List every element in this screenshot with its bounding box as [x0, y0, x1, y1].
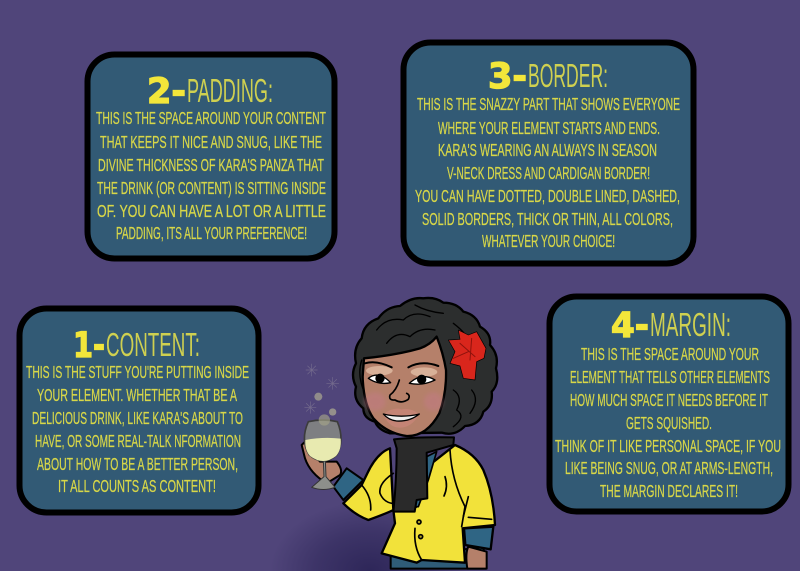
- text: content description: THIS IS THE STUFF YOU'RE PUTTING INSIDE: [26, 362, 249, 382]
- mouth: [383, 409, 419, 428]
- illustration: Kara holding a drink: [302, 298, 497, 569]
- heading: 4-margin: [611, 306, 731, 346]
- text: border description: WHATEVER YOUR CHOICE!: [482, 231, 615, 251]
- text: padding description: [96, 108, 326, 243]
- heading: 3-border: 3-: [488, 57, 527, 97]
- panel: 4 margin: [550, 296, 788, 512]
- dress neckline: [413, 452, 437, 507]
- legs and dress bottom: [391, 547, 486, 569]
- text: padding description: THAT KEEPS IT NICE AND SNUG, LIKE THE: [100, 132, 322, 152]
- heading: 3-border: [488, 57, 608, 97]
- text: padding description: THE DRINK (OR CONTENT) IS SITTING INSIDE: [97, 178, 326, 198]
- text: padding description: THIS IS THE SPACE AROUND YOUR CONTENT: [96, 108, 326, 128]
- heading: 3-border: BORDER:: [528, 57, 608, 94]
- nose: [390, 380, 409, 402]
- text: margin description: GETS SQUISHED.: [626, 413, 712, 433]
- heading: 2-padding: [147, 72, 273, 112]
- right sleeve cuff: [464, 527, 493, 549]
- text: padding description: DIVINE THICKNESS OF KARA'S PANZA THAT: [98, 155, 324, 175]
- heading: 2-padding: PADDING:: [187, 72, 273, 109]
- text: border description: KARA'S WEARING AN ALWAYS IN SEASON: [438, 140, 657, 160]
- text: padding description: PADDING, ITS ALL YOUR PREFERENCE!: [116, 223, 307, 243]
- panel: 1 content: [20, 308, 258, 512]
- text: content description: [26, 362, 249, 496]
- face: [363, 337, 446, 436]
- text: padding description: OF. YOU CAN HAVE A LOT OR A LITTLE: [97, 201, 326, 221]
- cardigan details: [362, 450, 492, 560]
- panel: 2 padding: [88, 54, 334, 258]
- hair: [353, 298, 497, 434]
- icon: hand: [302, 442, 341, 483]
- text: content description: DELICIOUS DRINK, LIKE KARA'S ABOUT TO: [32, 408, 243, 428]
- text: content description: IT ALL COUNTS AS CONTENT!: [58, 476, 216, 496]
- icon: right hand at hip: [466, 547, 487, 569]
- heading: 4-margin: MARGIN:: [650, 306, 731, 343]
- heading: 1-content: [73, 326, 200, 366]
- scarf: [393, 437, 454, 512]
- text: border description: V-NECK DRESS AND CARDIGAN BORDER!: [447, 163, 650, 183]
- heading: 1-content: CONTENT:: [106, 326, 200, 363]
- text: border description: [415, 94, 680, 251]
- icon: wine glass with bubbles: [304, 364, 341, 489]
- eyes and brows: [365, 362, 438, 384]
- left sleeve cuff: [333, 468, 363, 500]
- heading: 2-padding: 2-: [147, 72, 186, 112]
- text: content description: ABOUT HOW TO BE A BETTER PERSON,: [37, 454, 238, 474]
- heading: 4-margin: 4-: [611, 306, 649, 346]
- icon: red flower: [448, 330, 486, 380]
- panel: 3 border: [404, 42, 694, 264]
- text: margin description: [555, 344, 781, 501]
- heading: 1-content: 1-: [73, 326, 105, 366]
- eyeshadow and cheeks: [364, 366, 443, 411]
- cardigan: [343, 445, 495, 563]
- text: content description: HAVE, OR SOME REAL-TALK NFORMATION: [35, 431, 241, 451]
- text: content description: YOUR ELEMENT. WHETHER THAT BE A: [37, 385, 237, 405]
- hair curls: [360, 305, 475, 427]
